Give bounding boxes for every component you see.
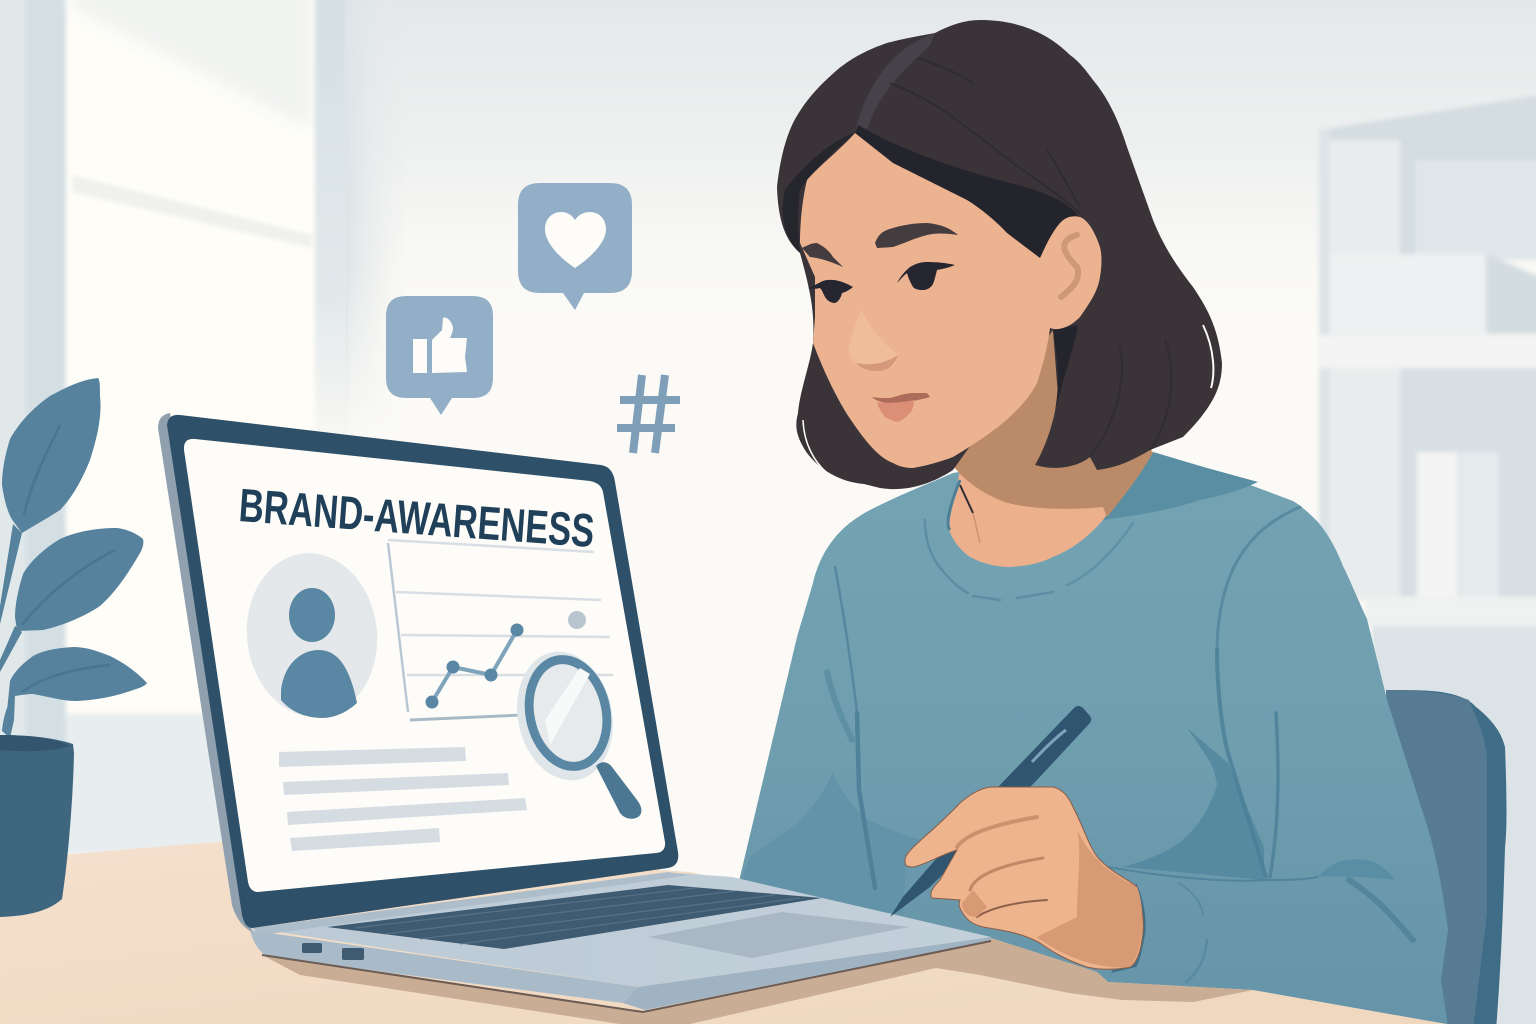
hair — [777, 20, 1222, 489]
pen — [890, 706, 1091, 917]
magnifying glass — [506, 643, 641, 819]
icon: potted plant — [0, 378, 147, 917]
icon: hashtag — [617, 375, 680, 453]
desk — [0, 840, 1536, 1024]
sweater: shoulder and arm shading — [740, 452, 1395, 915]
laptop — [158, 413, 991, 1012]
background: window on the left — [0, 0, 405, 854]
plant stems — [0, 524, 22, 738]
laptop base — [252, 873, 991, 987]
plant leaves — [2, 378, 101, 533]
hand — [905, 787, 1143, 969]
neck — [948, 320, 1153, 567]
ear detail — [1061, 235, 1078, 297]
eyes — [897, 262, 955, 290]
person — [737, 20, 1450, 1024]
eyebrows — [875, 223, 958, 248]
finger creases — [957, 817, 1047, 917]
chair back — [1386, 690, 1506, 1024]
desk shadow — [262, 938, 1253, 1024]
cuff and sleeve edge — [1111, 883, 1146, 973]
ports — [302, 943, 322, 953]
hand shadow — [1037, 830, 1142, 967]
laptop bezel — [167, 415, 678, 928]
hinge strip — [252, 872, 690, 935]
sweater — [737, 450, 1450, 1024]
laptop screen — [184, 439, 665, 892]
sweater: folds and seams — [827, 507, 1413, 982]
plant pot — [0, 735, 74, 917]
icon: thumbs-up notification bubble — [386, 296, 493, 415]
hair: shine and strands — [783, 33, 1213, 472]
trackpad — [648, 912, 909, 958]
screen heading: BRAND-AWARENESS — [237, 478, 596, 557]
icon: heart notification bubble — [518, 183, 632, 310]
background: shelves on the right — [1318, 95, 1536, 1024]
text lines — [279, 747, 527, 851]
profile avatar — [239, 547, 385, 723]
face — [800, 133, 1102, 468]
nose — [849, 310, 898, 370]
laptop lid edge — [158, 413, 252, 932]
mouth — [872, 393, 930, 403]
line chart — [388, 540, 613, 720]
keyboard — [327, 885, 822, 949]
pen and hand — [890, 706, 1143, 969]
